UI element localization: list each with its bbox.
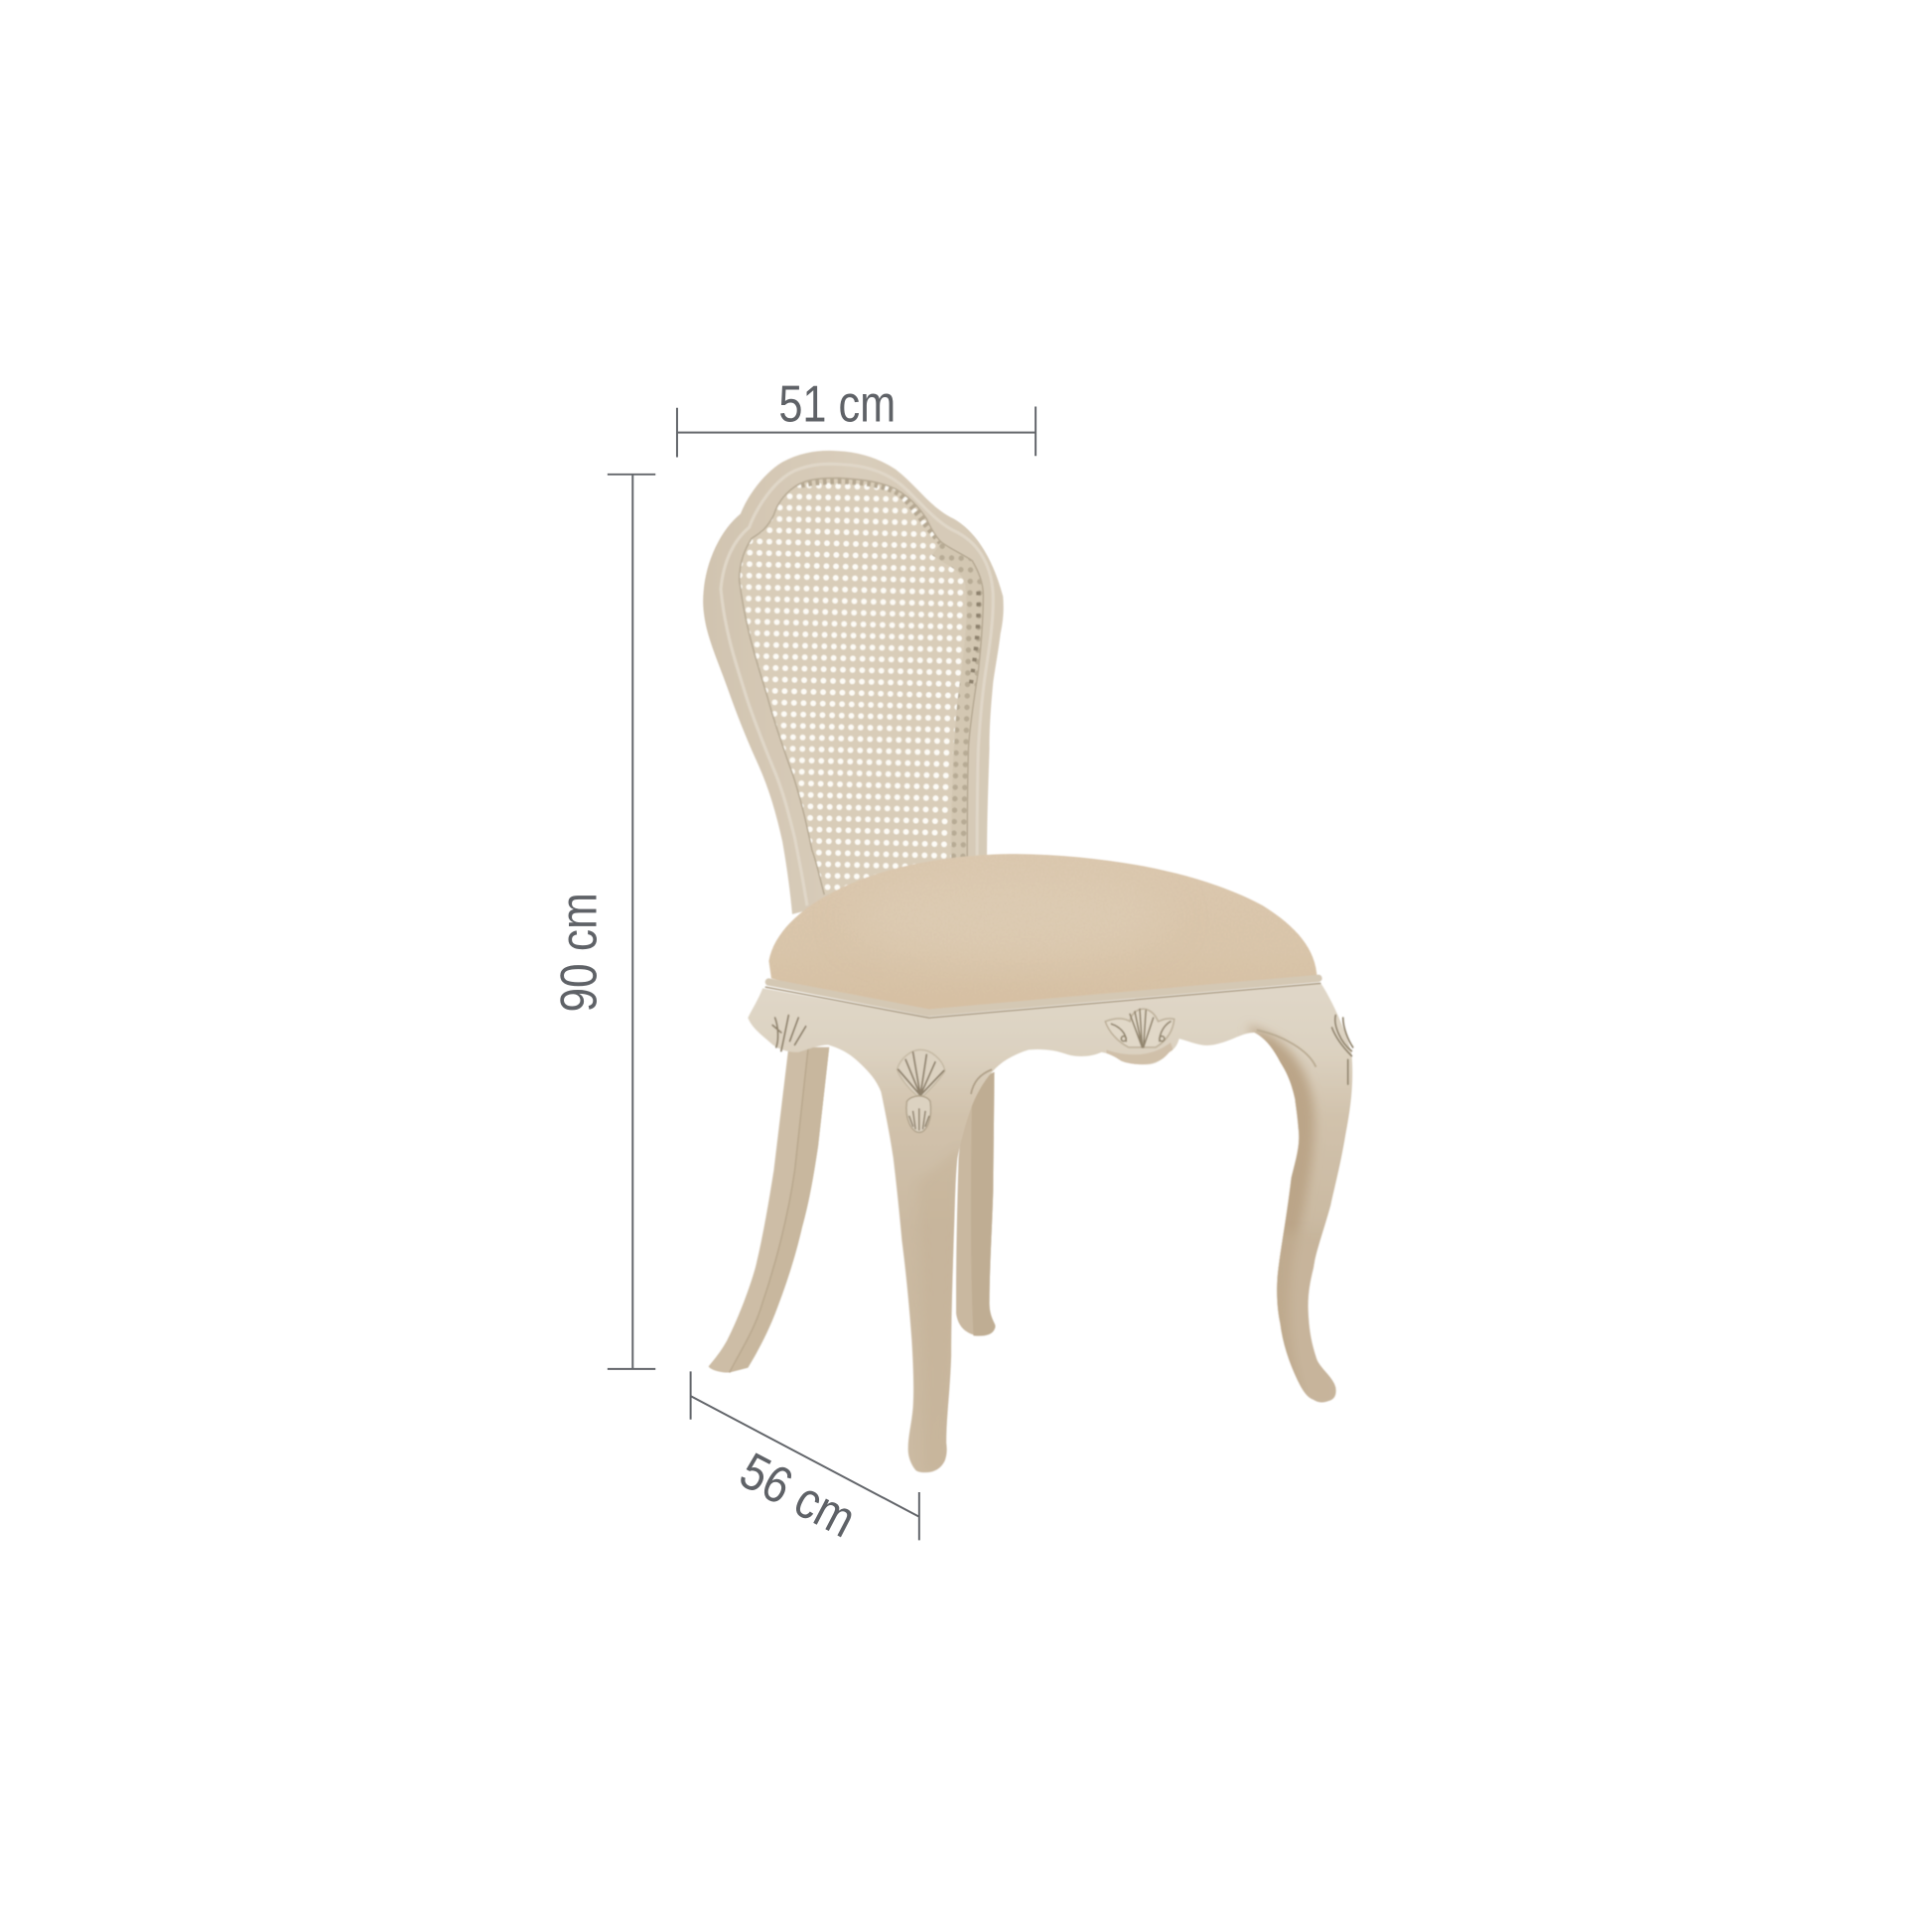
depth line <box>691 1371 919 1540</box>
seat frame and front legs <box>748 983 1352 1472</box>
rear right leg <box>956 1072 995 1335</box>
carving: centre apron shell <box>1105 1009 1174 1047</box>
chair <box>703 451 1353 1472</box>
carving: right corner <box>1332 1016 1353 1084</box>
dimension: height 90 cm <box>551 475 655 1369</box>
depth label: 56 cm <box>731 1443 865 1549</box>
rear left leg <box>709 1047 829 1373</box>
seat grain <box>763 850 1320 1013</box>
width line <box>677 407 1035 457</box>
right leg lower tone <box>1308 1298 1309 1299</box>
seat fabric texture <box>763 850 1320 1013</box>
infographic: chair with dimensions <box>560 385 1354 1541</box>
apron pendant shadow <box>1106 1042 1173 1064</box>
rear right leg shaded half <box>971 1072 995 1336</box>
dimension: depth 56 cm <box>691 1371 919 1549</box>
seat soft highlight <box>850 879 1171 957</box>
width label: 51 cm <box>778 375 896 433</box>
cane top edge <box>801 481 941 542</box>
carving: leg scroll left <box>971 1069 992 1094</box>
right leg shadow <box>1247 1026 1314 1402</box>
backrest moulding highlight <box>721 464 993 905</box>
rear left leg ridge line <box>730 1047 808 1373</box>
cane right woven band <box>941 542 983 869</box>
seat cushion <box>768 854 1317 1011</box>
dimension: width 51 cm <box>677 375 1035 457</box>
seat rim shadow line <box>765 983 1320 1018</box>
carving: shell on front leg <box>897 1049 945 1133</box>
carving: left corner <box>772 1016 806 1051</box>
front leg shadow <box>943 1175 944 1176</box>
seat rim <box>768 978 1318 1013</box>
cane right dark gaps <box>971 592 979 684</box>
height label: 90 cm <box>551 893 609 1013</box>
cane panel <box>740 479 983 891</box>
rear left leg shaded half <box>730 1047 829 1373</box>
leg shading <box>918 1026 1343 1472</box>
carving: leg scroll right <box>1257 1031 1315 1067</box>
height line <box>608 475 655 1369</box>
cane inner outline <box>740 479 983 895</box>
backrest frame <box>703 451 1004 914</box>
